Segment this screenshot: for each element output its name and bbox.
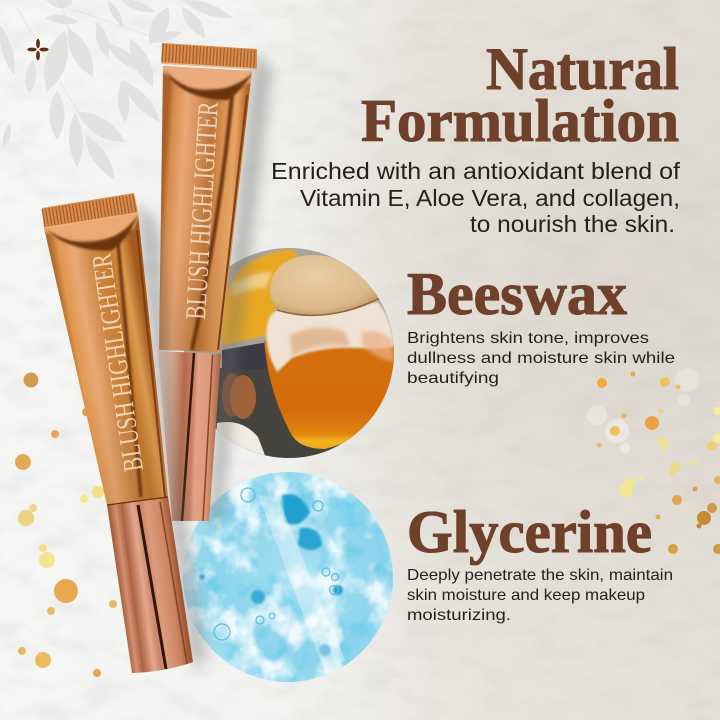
honey [264, 340, 398, 449]
heading: Glycerine: Glycerine [407, 499, 652, 565]
front tube ferrule [107, 497, 193, 673]
dark table [216, 368, 350, 458]
gold confetti: right [587, 368, 720, 554]
back tube label: BLUSH HIGHLIGHTER [180, 100, 225, 320]
intro text: Enriched with an antioxidant blend of [271, 158, 681, 184]
Beeswax description: Brightens skin tone, improves [407, 330, 649, 347]
back tube shadow [208, 50, 272, 522]
icon: sparkle [27, 39, 49, 60]
photo: glycerine gel [180, 470, 396, 686]
photo: honey jar [184, 248, 394, 458]
back tube cap [161, 43, 257, 69]
Glycerine description: skin moisture and keep makeup [407, 587, 645, 604]
gel glass vial [258, 495, 345, 672]
title: Natural Formulation: Formulation [361, 88, 679, 154]
front tube cap [42, 193, 138, 228]
title: Natural Formulation: Natural [486, 36, 679, 102]
glass reflections [290, 328, 350, 356]
back tube body [159, 66, 252, 352]
intro text: Vitamin E, Aloe Vera, and collagen, [300, 185, 680, 211]
heading: Beeswax: Beeswax [407, 261, 627, 327]
gel bubbles [214, 488, 338, 640]
checked cloth [222, 342, 268, 370]
sugar highlight [232, 272, 272, 296]
Glycerine description: Deeply penetrate the skin, maintain [407, 567, 673, 584]
product: front tube [35, 193, 206, 680]
lemon behind jar [222, 250, 296, 345]
Glycerine description [407, 567, 673, 624]
back tube ferrule [158, 351, 221, 521]
title: Natural Formulation [361, 36, 679, 154]
glass upper [266, 302, 394, 372]
intro text: to nourish the skin. [470, 211, 675, 237]
wooden nuts [222, 373, 256, 419]
Glycerine description: moisturizing. [407, 607, 511, 624]
front tube label: BLUSH HIGHLIGHTER [86, 251, 150, 474]
Beeswax description: dullness and moisture skin while [407, 350, 675, 367]
front tube shadow [136, 200, 206, 668]
product: back tube [150, 43, 272, 525]
intro text [271, 158, 681, 237]
Beeswax description: beautifying [407, 370, 499, 387]
gold confetti: left [15, 372, 117, 677]
front tube body [44, 213, 168, 505]
white flower [216, 422, 265, 456]
lid [270, 255, 379, 315]
decorative leaves [0, 0, 233, 180]
Beeswax description [407, 330, 675, 387]
